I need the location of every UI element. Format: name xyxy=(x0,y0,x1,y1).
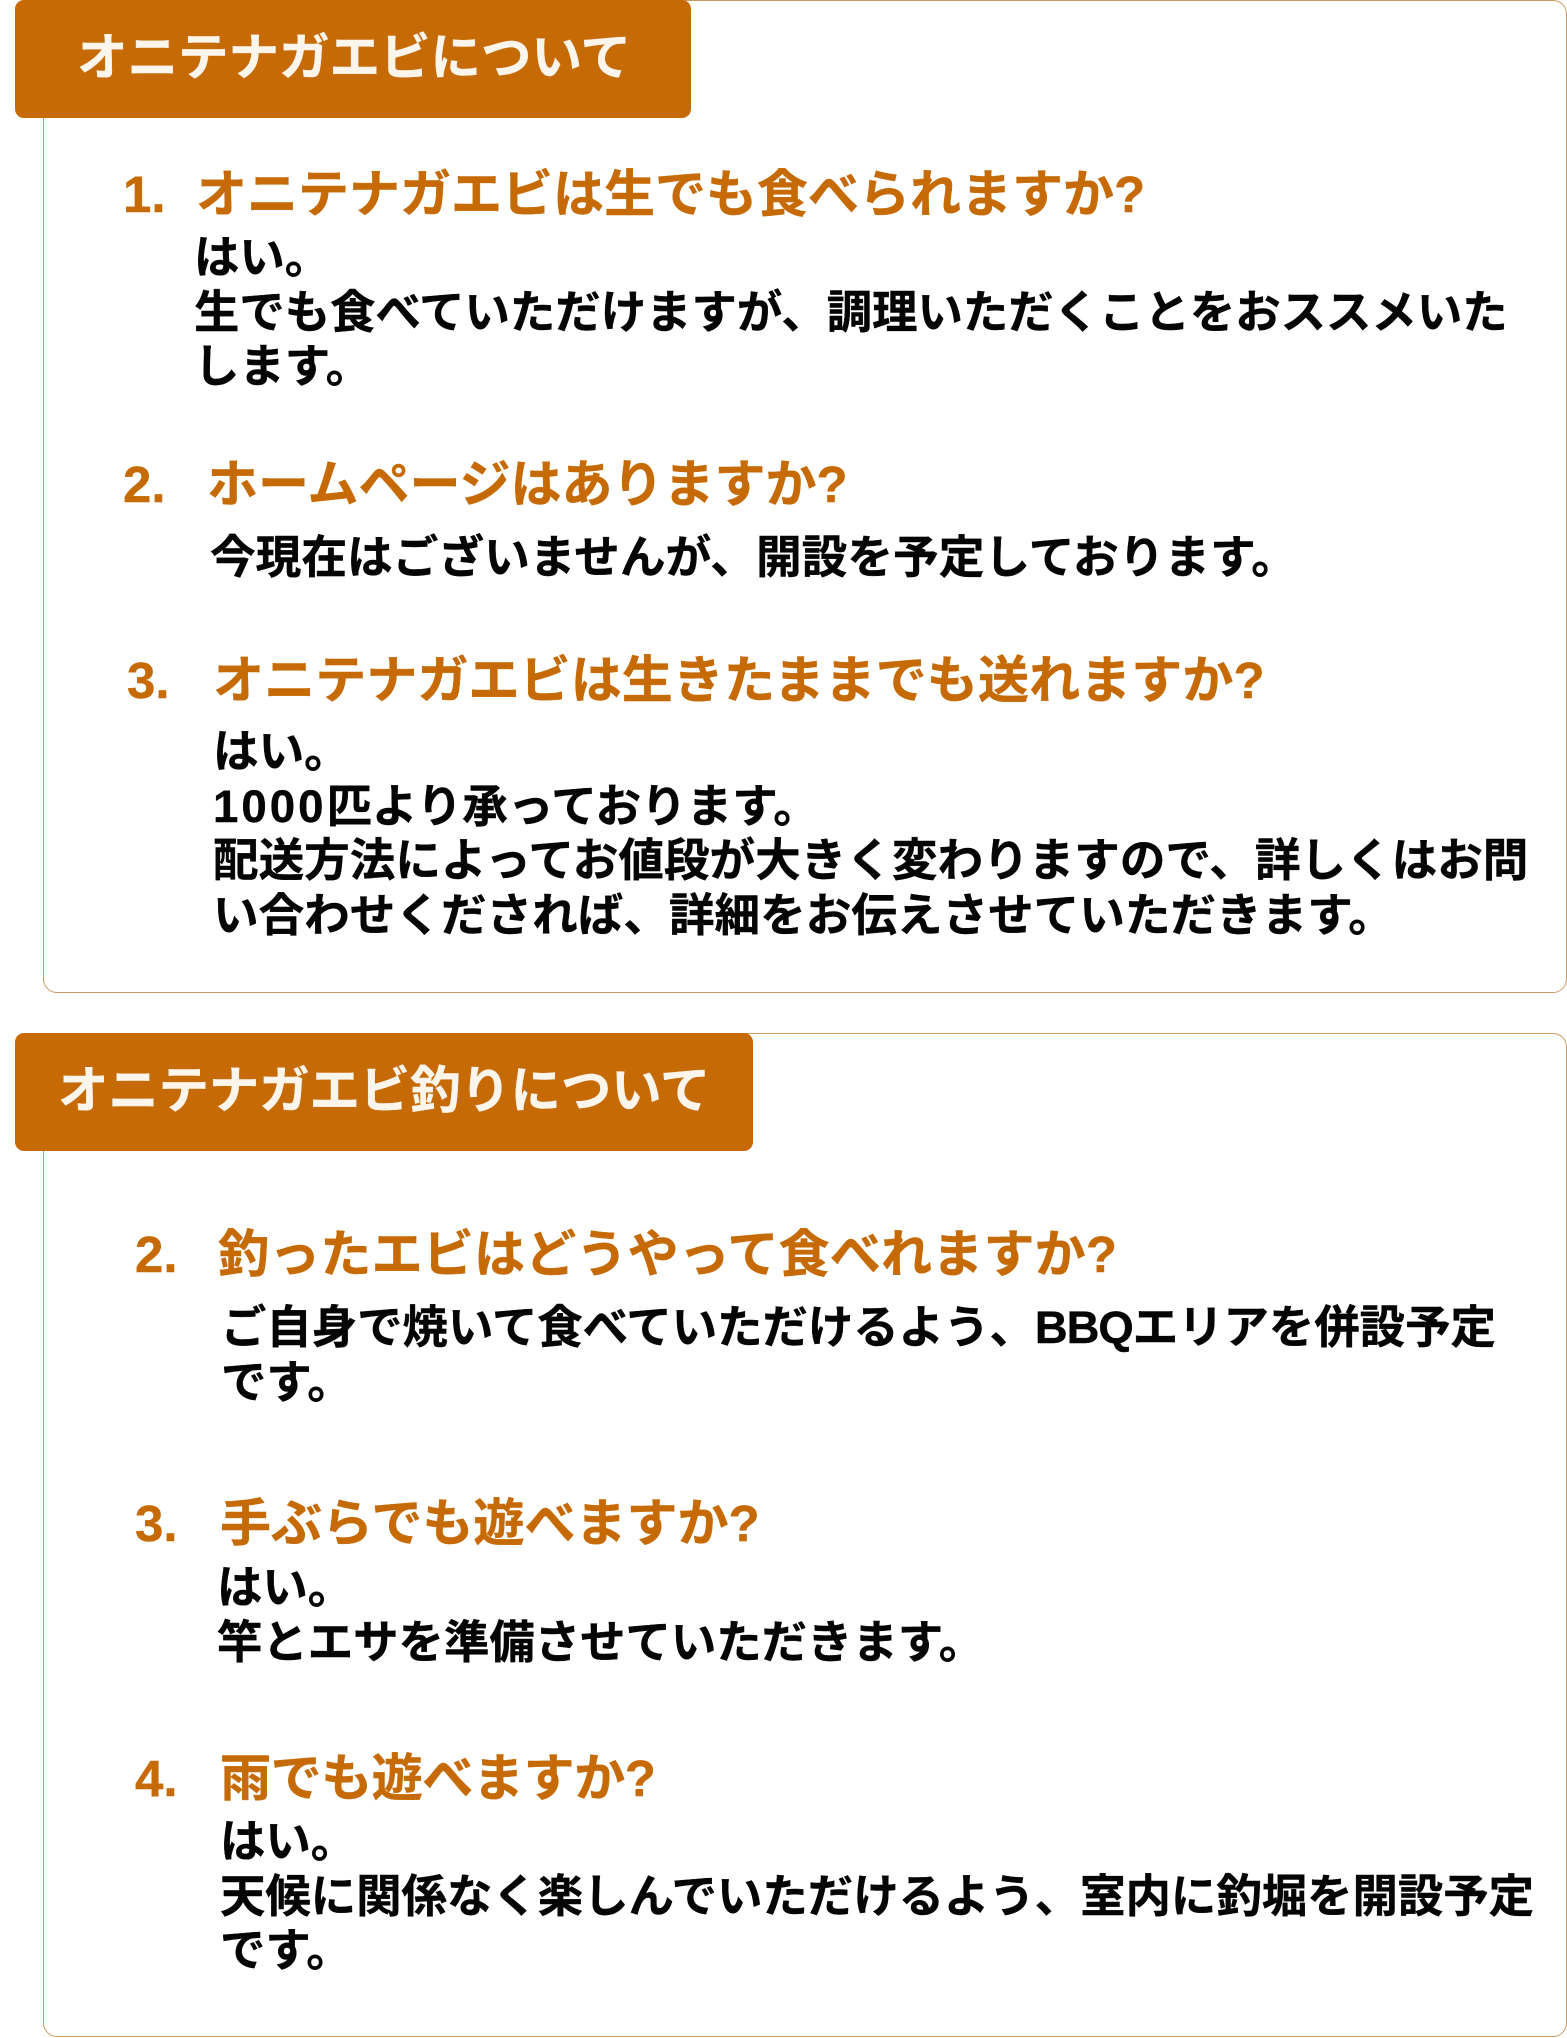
question 3 (fishing): 3. xyxy=(135,1495,178,1552)
panel: about the shrimp xyxy=(43,0,1567,993)
answer 2 (fishing): ご自身で焼いて食べていただけるよう、BBQエリアを併設予定 xyxy=(221,1302,1496,1353)
heading: about the shrimp: オニテナガエビについて xyxy=(77,29,631,86)
answer 1 xyxy=(194,232,1508,392)
question 2: ホームページはありますか? xyxy=(207,456,848,513)
answer 3: い合わせくだされば、詳細をお伝えさせていただきます。 xyxy=(213,890,1394,941)
answer 3: はい。 xyxy=(213,726,350,777)
answer 3 (fishing): 竿とエサを準備させていただきます。 xyxy=(217,1617,984,1668)
heading: about shrimp fishing xyxy=(15,1033,753,1151)
answer 2 (fishing): です。 xyxy=(221,1357,353,1408)
answer 4 (fishing): はい。 xyxy=(220,1816,356,1867)
answer 1: はい。 xyxy=(194,232,330,283)
answer 3: 配送方法によってお値段が大きく変わりますので、詳しくはお問 xyxy=(213,835,1528,886)
answer 4 (fishing): です。 xyxy=(220,1925,352,1976)
question 2 (fishing): 2. xyxy=(135,1226,178,1283)
answer 4 (fishing) xyxy=(220,1816,1534,1976)
heading: about shrimp fishing: オニテナガエビ釣りについて xyxy=(58,1062,710,1119)
answer 4 (fishing): 天候に関係なく楽しんでいただけるよう、室内に釣堀を開設予定 xyxy=(220,1871,1534,1922)
heading: about the shrimp xyxy=(15,0,691,118)
question 4 (fishing): 雨でも遊べますか? xyxy=(220,1750,656,1807)
answer 2 (fishing) xyxy=(221,1302,1496,1408)
answer 3: 1000匹より承っております。 xyxy=(213,781,819,832)
answer 3 xyxy=(213,726,1528,941)
question 3: 3. xyxy=(127,652,170,709)
answer 1: します。 xyxy=(194,341,371,392)
question 3 (fishing): 手ぶらでも遊べますか? xyxy=(220,1495,760,1552)
question 3: オニテナガエビは生きたままでも送れますか? xyxy=(213,652,1265,709)
question 1: オニテナガエビは生でも食べられますか? xyxy=(196,166,1145,223)
answer 3 (fishing): はい。 xyxy=(217,1562,353,1613)
question 4 (fishing): 4. xyxy=(135,1750,178,1807)
question 2 (fishing): 釣ったエビはどうやって食べれますか? xyxy=(218,1226,1117,1283)
question 2: 2. xyxy=(123,456,166,513)
answer 1: 生でも食べていただけますが、調理いただくことをおススメいた xyxy=(194,287,1508,338)
question 1: 1. xyxy=(123,166,166,223)
answer 2: 今現在はございませんが、開設を予定しております。 xyxy=(210,532,1297,583)
answer 3 (fishing) xyxy=(217,1562,984,1668)
panel: about shrimp fishing xyxy=(43,1033,1567,2037)
